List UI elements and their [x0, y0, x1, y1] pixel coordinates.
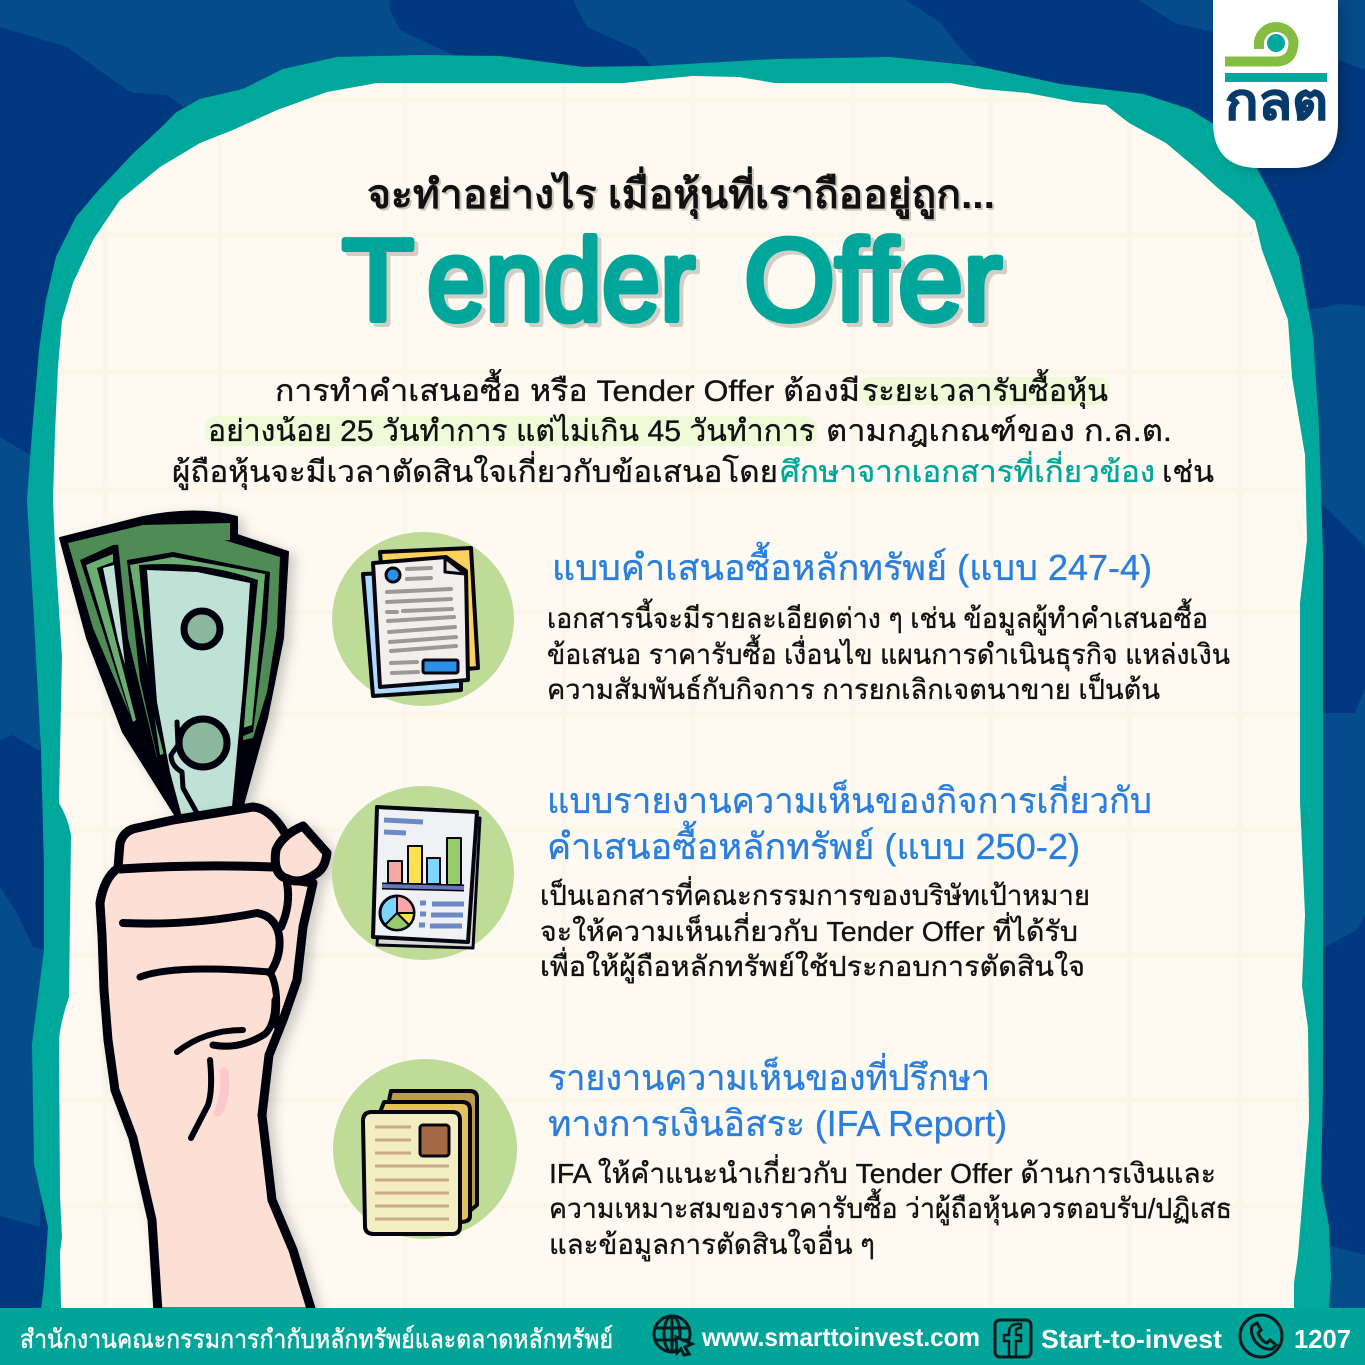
intro paragraph: ระยะเวลารับซื้อหุ้น	[862, 369, 1108, 410]
logo mark spiral	[1225, 27, 1327, 82]
section 3 body	[549, 1154, 1232, 1262]
facebook name: Start-to-invest	[1041, 1324, 1222, 1354]
section 3 heading	[548, 1053, 1007, 1144]
title: T	[342, 215, 414, 345]
title: ender	[431, 219, 699, 349]
section 1 body: เอกสารนี้จะมีรายละเอียดต่าง ๆ เช่น ข้อมูลผู้ทำคำเสนอซื้อ	[547, 598, 1208, 636]
icon: report folder	[333, 1059, 517, 1239]
title: Offer	[748, 219, 1006, 349]
title: T	[346, 219, 418, 349]
intro paragraph: การทำคำเสนอซื้อ หรือ Tender Offer ต้องมี	[275, 369, 860, 408]
logo wordmark: กลต	[1225, 74, 1328, 130]
icon: phone	[1240, 1315, 1282, 1357]
intro paragraph: ผู้ถือหุ้นจะมีเวลาตัดสินใจเกี่ยวกับข้อเสนอโดย	[172, 451, 778, 491]
footer bar	[0, 1308, 1365, 1365]
hotline: 1207	[1294, 1324, 1351, 1354]
intro paragraph: ศึกษาจากเอกสารที่เกี่ยวข้อง	[780, 451, 1155, 489]
icon: document stack	[332, 532, 514, 706]
website: www.smarttoinvest.com	[701, 1322, 980, 1352]
money notes	[60, 512, 288, 818]
icon: report chart	[332, 786, 514, 960]
intro paragraph	[172, 369, 1214, 491]
intro paragraph: อย่างน้อย 25 วันทำการ แต่ไม่เกิน 45 วันทำการ	[208, 413, 815, 448]
section 2 body	[540, 876, 1090, 984]
logo badge	[1213, 0, 1338, 168]
section 2 heading: แบบรายงานความเห็นของกิจการเกี่ยวกับ	[547, 776, 1152, 821]
section 1 heading: แบบคำเสนอซื้อหลักทรัพย์ (แบบ 247-4)	[552, 541, 1152, 588]
heading: จะทำอย่างไร เมื่อหุ้นที่เราถืออยู่ถูก...	[367, 166, 995, 220]
heading: จะทำอย่างไร เมื่อหุ้นที่เราถืออยู่ถูก...	[369, 168, 997, 222]
section 3 heading: ทางการเงินอิสระ (IFA Report)	[548, 1103, 1007, 1144]
section 3 heading: รายงานความเห็นของที่ปรึกษา	[548, 1053, 990, 1098]
title: Offer	[744, 215, 1002, 345]
icon: facebook	[995, 1320, 1031, 1357]
section 2 body: เป็นเอกสารที่คณะกรรมการของบริษัทเป้าหมาย	[540, 876, 1090, 911]
intro paragraph: เช่น	[1162, 456, 1214, 489]
hand	[100, 807, 327, 1312]
section 2 body: เพื่อให้ผู้ถือหลักทรัพย์ใช้ประกอบการตัดสินใจ	[540, 947, 1085, 984]
icon: globe	[654, 1316, 692, 1355]
title: ender	[427, 215, 695, 345]
intro paragraph: ตามกฎเกณฑ์ของ ก.ล.ต.	[826, 414, 1172, 448]
section 1	[332, 532, 1230, 706]
section 3 body: และข้อมูลการตัดสินใจอื่น ๆ	[549, 1225, 875, 1262]
section 3 body: IFA ให้คำแนะนำเกี่ยวกับ Tender Offer ด้านการเงินและ	[549, 1154, 1216, 1189]
section 2 heading: คำเสนอซื้อหลักทรัพย์ (แบบ 250-2)	[547, 820, 1080, 867]
section 2	[332, 776, 1152, 984]
section 2 heading	[547, 776, 1152, 867]
section 1 body: ความสัมพันธ์กับกิจการ การยกเลิกเจตนาขาย เป็นต้น	[547, 672, 1160, 705]
title	[342, 215, 1006, 349]
section 3 body: ความเหมาะสมของราคารับซื้อ ว่าผู้ถือหุ้นควรตอบรับ/ปฏิเสธ	[549, 1188, 1232, 1226]
section 3	[333, 1053, 1232, 1262]
illustration: hand holding money	[60, 512, 327, 1312]
section 2 body: จะให้ความเห็นเกี่ยวกับ Tender Offer ที่ได้รับ	[540, 912, 1078, 947]
footer organisation name: สำนักงานคณะกรรมการกำกับหลักทรัพย์และตลาดหลักทรัพย์	[20, 1324, 613, 1354]
section 1 body	[547, 598, 1230, 705]
section 1 body: ข้อเสนอ ราคารับซื้อ เงื่อนไข แผนการดำเนินธุรกิจ แหล่งเงิน	[547, 634, 1230, 672]
